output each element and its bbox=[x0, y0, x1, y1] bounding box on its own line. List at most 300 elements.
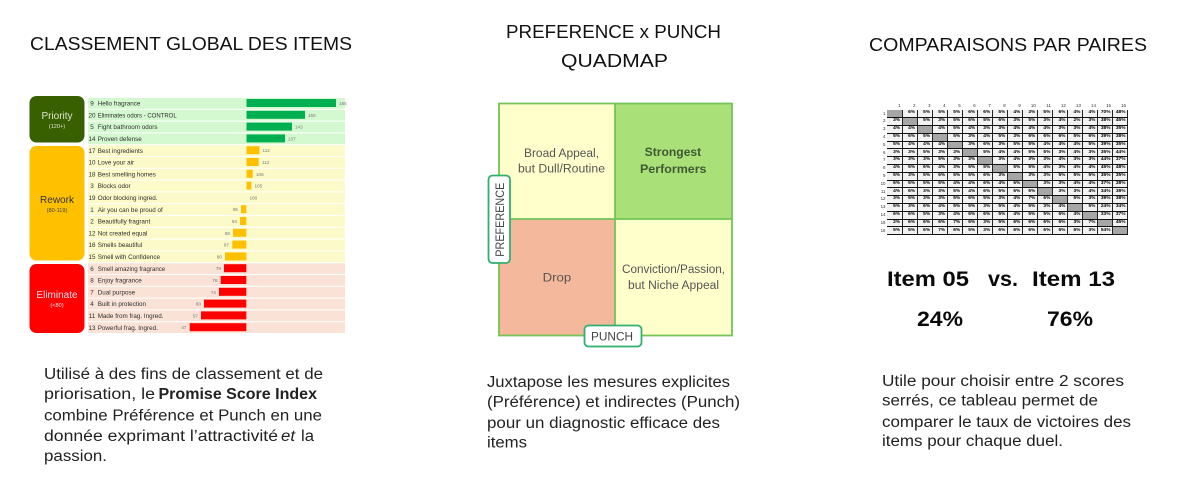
item numbers and labels: Not created equal bbox=[98, 230, 147, 237]
title: preference x punch quadmap bbox=[506, 21, 721, 71]
pairwise comparison matrix: 5% bbox=[998, 189, 1005, 194]
text block: classement description: la bbox=[301, 428, 314, 445]
item numbers and labels: 16 bbox=[88, 242, 96, 249]
pairwise comparison matrix: 5% bbox=[1088, 204, 1095, 209]
pairwise comparison matrix: 11 bbox=[881, 189, 886, 194]
pairwise comparison matrix: 3% bbox=[938, 118, 945, 123]
pairwise comparison matrix: 3% bbox=[998, 196, 1005, 201]
pairwise comparison matrix: 2 bbox=[913, 103, 916, 108]
pairwise comparison matrix: 5% bbox=[1088, 142, 1095, 147]
pairwise comparison matrix: 5% bbox=[1028, 212, 1035, 217]
score values: 143 bbox=[295, 125, 303, 130]
pairwise comparison matrix: 6% bbox=[1013, 228, 1020, 233]
pairwise comparison matrix: 5% bbox=[1058, 173, 1065, 178]
pairwise comparison matrix: 5% bbox=[923, 118, 930, 123]
pairwise comparison matrix: 5% bbox=[908, 196, 915, 201]
pairwise comparison matrix: 6% bbox=[983, 110, 990, 115]
pairwise comparison matrix: 13 bbox=[881, 204, 886, 209]
pairwise comparison matrix: 3% bbox=[1043, 204, 1050, 209]
item numbers and labels: Dual purpose bbox=[98, 289, 136, 296]
pairwise comparison matrix: 4% bbox=[968, 126, 975, 131]
score values: 112 bbox=[262, 148, 270, 153]
pairwise comparison matrix: 38% bbox=[1116, 181, 1126, 186]
pairwise comparison matrix: 3% bbox=[938, 196, 945, 201]
pairwise comparison matrix: 6% bbox=[1058, 228, 1065, 233]
quadrant: conviction: Conviction/Passion, bbox=[622, 264, 725, 276]
pairwise comparison matrix: 3% bbox=[998, 142, 1005, 147]
pairwise comparison matrix: 5% bbox=[1028, 150, 1035, 155]
pairwise comparison matrix: 4% bbox=[998, 150, 1005, 155]
pairwise comparison matrix: 3% bbox=[1073, 126, 1080, 131]
pairwise comparison matrix: 38% bbox=[1116, 196, 1126, 201]
pairwise comparison matrix: 5 bbox=[883, 142, 886, 147]
quadrant: conviction bbox=[615, 219, 732, 335]
pairwise comparison matrix: 4% bbox=[998, 181, 1005, 186]
item numbers and labels: Blocks odor bbox=[98, 183, 131, 190]
text block: classement description: Utilisé à des fins de classement et de bbox=[44, 366, 323, 383]
pairwise comparison matrix: 5% bbox=[938, 181, 945, 186]
pairwise comparison matrix: 3% bbox=[998, 157, 1005, 162]
pairwise comparison matrix: 6% bbox=[908, 189, 915, 194]
item numbers and labels: 19 bbox=[88, 195, 96, 202]
pairwise comparison matrix: 6% bbox=[968, 220, 975, 225]
pairwise comparison matrix: 70% bbox=[1101, 110, 1110, 115]
pairwise comparison matrix: 3% bbox=[938, 150, 945, 155]
pairwise comparison matrix: 6% bbox=[983, 212, 990, 217]
pairwise comparison matrix: 4% bbox=[968, 189, 975, 194]
pairwise comparison matrix: 5% bbox=[1073, 173, 1080, 178]
pairwise comparison matrix: 4% bbox=[1088, 165, 1095, 170]
pairwise comparison matrix: 4% bbox=[1043, 126, 1050, 131]
pairwise comparison matrix: 5% bbox=[1013, 165, 1020, 170]
pairwise comparison matrix: 4% bbox=[1013, 196, 1020, 201]
pairwise comparison matrix: 3% bbox=[893, 196, 900, 201]
pairwise comparison matrix: 3% bbox=[983, 220, 990, 225]
pairwise comparison matrix: 37% bbox=[1101, 181, 1110, 186]
pairwise comparison matrix: 5% bbox=[998, 212, 1005, 217]
pairwise comparison matrix: 3% bbox=[923, 157, 930, 162]
item numbers and labels: 7 bbox=[90, 289, 94, 296]
category: rework bbox=[30, 146, 84, 260]
item numbers and labels: 12 bbox=[88, 230, 96, 237]
score values: 95 bbox=[233, 207, 238, 212]
pairwise comparison matrix: 6% bbox=[983, 181, 990, 186]
pairwise comparison matrix: 5% bbox=[953, 204, 960, 209]
pairwise comparison matrix: 5% bbox=[923, 212, 930, 217]
category: rework: (80-119) bbox=[47, 208, 67, 214]
pairwise comparison matrix: 35% bbox=[1116, 126, 1126, 131]
pairwise comparison matrix: 3% bbox=[1013, 118, 1020, 123]
pairwise comparison matrix: 4% bbox=[893, 165, 900, 170]
pairwise comparison matrix: 5% bbox=[893, 204, 900, 209]
pairwise comparison matrix: 4% bbox=[968, 181, 975, 186]
pairwise comparison matrix: 3% bbox=[1043, 181, 1050, 186]
pairwise comparison matrix: 6% bbox=[1073, 228, 1080, 233]
pairwise comparison matrix: 3% bbox=[893, 150, 900, 155]
pairwise comparison matrix: 38% bbox=[1101, 126, 1110, 131]
score values: 105 bbox=[254, 184, 263, 189]
pairwise comparison matrix: 4% bbox=[953, 181, 960, 186]
pairwise comparison matrix: 5% bbox=[1073, 134, 1080, 139]
pairwise comparison matrix: 15 bbox=[881, 220, 886, 225]
pairwise comparison matrix: 3% bbox=[893, 157, 900, 162]
text block: classement description: donnée exprimant l’attractivité bbox=[44, 428, 278, 445]
quadrant: drop: Drop bbox=[543, 273, 571, 285]
pairwise comparison matrix: 3% bbox=[1073, 157, 1080, 162]
item numbers and labels: Hello fragrance bbox=[98, 101, 141, 108]
pairwise comparison matrix: 7% bbox=[938, 228, 945, 233]
item numbers and labels: Odor blocking ingred. bbox=[98, 195, 158, 202]
pairwise comparison matrix: 5% bbox=[953, 189, 960, 194]
pairwise comparison matrix: 10 bbox=[1031, 103, 1036, 108]
pairwise comparison matrix: 3% bbox=[938, 212, 945, 217]
pairwise comparison matrix: 44% bbox=[1101, 157, 1110, 162]
comparison headline: item 05 vs item 13: vs. bbox=[988, 268, 1018, 291]
item numbers and labels: Air you can be proud of bbox=[98, 207, 163, 214]
pairwise comparison matrix: 15 bbox=[1106, 103, 1111, 108]
pairwise comparison matrix: 45% bbox=[1101, 165, 1110, 170]
pairwise comparison matrix: 5% bbox=[908, 181, 915, 186]
pairwise comparison matrix: 5% bbox=[893, 173, 900, 178]
item numbers and labels: 4 bbox=[90, 301, 94, 308]
pairwise comparison matrix: 48% bbox=[1116, 165, 1126, 170]
pairwise comparison matrix: 4% bbox=[1073, 150, 1080, 155]
pairwise comparison matrix: 9 bbox=[1018, 103, 1021, 108]
pairwise comparison matrix: 4% bbox=[1073, 142, 1080, 147]
pairwise comparison matrix: 38% bbox=[1116, 189, 1126, 194]
pairwise comparison matrix: 5% bbox=[938, 157, 945, 162]
pairwise comparison matrix: 5% bbox=[983, 150, 990, 155]
pairwise comparison matrix: 6% bbox=[923, 228, 930, 233]
pairwise comparison matrix: 6% bbox=[1013, 189, 1020, 194]
pairwise comparison matrix: 4% bbox=[1043, 142, 1050, 147]
pairwise comparison matrix: 5% bbox=[983, 118, 990, 123]
text block: comparison description: items pour chaque duel. bbox=[882, 433, 1063, 450]
pairwise comparison matrix: 6% bbox=[908, 212, 915, 217]
pairwise comparison matrix: 5% bbox=[998, 110, 1005, 115]
pairwise comparison matrix: 44% bbox=[1116, 150, 1126, 155]
pairwise comparison matrix: 4% bbox=[1088, 126, 1095, 131]
pairwise comparison matrix: 6% bbox=[1043, 196, 1050, 201]
pairwise comparison matrix: 5% bbox=[1028, 118, 1035, 123]
quadrant: strongest performers bbox=[615, 104, 732, 219]
pairwise comparison matrix: 3% bbox=[1088, 196, 1095, 201]
pairwise comparison matrix: 3% bbox=[893, 118, 900, 123]
pairwise comparison matrix: 3% bbox=[908, 157, 915, 162]
pairwise comparison matrix: 6% bbox=[968, 110, 975, 115]
pairwise comparison matrix: 3% bbox=[953, 157, 960, 162]
score values: 60 bbox=[196, 302, 201, 307]
pairwise comparison matrix: 4% bbox=[1013, 204, 1020, 209]
score values: 156 bbox=[308, 113, 316, 118]
pairwise comparison matrix: 6% bbox=[998, 228, 1005, 233]
pairwise comparison matrix: 6% bbox=[968, 118, 975, 123]
panel: quadmap bbox=[488, 104, 732, 346]
pairwise comparison matrix: 54% bbox=[1101, 228, 1110, 233]
score values: 112 bbox=[262, 160, 270, 165]
pairwise comparison matrix: 3 bbox=[928, 103, 931, 108]
pairwise comparison matrix: 3% bbox=[1058, 189, 1065, 194]
comparison percentages bbox=[917, 308, 1093, 331]
pairwise comparison matrix: 10 bbox=[881, 181, 886, 186]
row backgrounds bbox=[88, 98, 345, 333]
pairwise comparison matrix: 5% bbox=[1028, 165, 1035, 170]
pairwise comparison matrix: 14 bbox=[881, 212, 886, 217]
pairwise comparison matrix: 3% bbox=[1043, 173, 1050, 178]
pairwise comparison matrix: 5% bbox=[908, 228, 915, 233]
pairwise comparison matrix: 33% bbox=[1101, 212, 1110, 217]
pairwise comparison matrix: 5% bbox=[893, 134, 900, 139]
category: eliminate bbox=[30, 264, 84, 333]
item numbers and labels: 3 bbox=[90, 183, 94, 190]
pairwise comparison matrix: 5% bbox=[923, 134, 930, 139]
pairwise comparison matrix: 5% bbox=[953, 196, 960, 201]
pairwise comparison matrix: 9 bbox=[883, 173, 886, 178]
pairwise comparison matrix: 6% bbox=[998, 118, 1005, 123]
pairwise comparison matrix: 4% bbox=[938, 126, 945, 131]
item numbers and labels: 15 bbox=[88, 254, 96, 261]
pairwise comparison matrix: 6% bbox=[908, 134, 915, 139]
text block: comparison description: comparer le taux de victoires des bbox=[882, 414, 1131, 431]
pairwise comparison matrix: 3% bbox=[1028, 173, 1035, 178]
pairwise comparison matrix: 3% bbox=[1028, 157, 1035, 162]
pairwise comparison matrix: 5% bbox=[953, 118, 960, 123]
pairwise comparison matrix: 6% bbox=[1058, 220, 1065, 225]
pairwise comparison matrix: 5% bbox=[953, 134, 960, 139]
text block: classement description: combine Préférence et Punch en une bbox=[44, 408, 322, 424]
pairwise comparison matrix: 24% bbox=[1101, 204, 1110, 209]
score values: 94 bbox=[232, 219, 237, 224]
category: priority bbox=[30, 96, 84, 142]
item numbers and labels: Smells beautiful bbox=[98, 242, 142, 249]
text block: quadmap description: items bbox=[487, 434, 527, 452]
pairwise comparison matrix: 4% bbox=[1088, 181, 1095, 186]
pairwise comparison matrix: 3% bbox=[1073, 189, 1080, 194]
pairwise comparison matrix: 39% bbox=[1101, 196, 1110, 201]
bars bbox=[190, 99, 336, 331]
item numbers and labels: Eliminates odors - CONTROL bbox=[98, 112, 177, 119]
pairwise comparison matrix: 14 bbox=[1091, 103, 1096, 108]
pairwise comparison matrix: 13 bbox=[1076, 103, 1081, 108]
pairwise comparison matrix: 8 bbox=[883, 165, 886, 170]
pairwise comparison matrix: 4% bbox=[983, 134, 990, 139]
quadrant: broad appeal bbox=[499, 104, 615, 219]
pairwise comparison matrix: 5% bbox=[1013, 142, 1020, 147]
pairwise comparison matrix: 5% bbox=[998, 220, 1005, 225]
pairwise comparison matrix: 3% bbox=[983, 204, 990, 209]
pairwise comparison matrix: 3% bbox=[1043, 118, 1050, 123]
category: priority: (120+) bbox=[49, 124, 65, 130]
comparison percentages: 24% bbox=[917, 308, 963, 331]
text block: quadmap description: pour un diagnostic efficace des bbox=[487, 415, 720, 432]
item numbers and labels: Smell with Confidence bbox=[98, 254, 160, 261]
pairwise comparison matrix: 6% bbox=[938, 173, 945, 178]
score values bbox=[181, 101, 347, 330]
pairwise comparison matrix: 6% bbox=[923, 204, 930, 209]
pairwise comparison matrix: 6% bbox=[968, 196, 975, 201]
pairwise comparison matrix: 3% bbox=[1088, 157, 1095, 162]
pairwise comparison matrix: 5% bbox=[1043, 150, 1050, 155]
text block: comparison description: serrés, ce tableau permet de bbox=[882, 392, 1098, 410]
pairwise comparison matrix: 3% bbox=[998, 126, 1005, 131]
pairwise comparison matrix: 5% bbox=[953, 173, 960, 178]
pairwise comparison matrix: 3% bbox=[968, 157, 975, 162]
pairwise comparison matrix: 16 bbox=[881, 228, 886, 233]
title: preference x punch quadmap: PREFERENCE x PUNCH bbox=[506, 21, 721, 42]
pairwise comparison matrix: 3% bbox=[1058, 181, 1065, 186]
pairwise comparison matrix: 5% bbox=[1073, 196, 1080, 201]
pairwise comparison matrix: 6% bbox=[983, 142, 990, 147]
pairwise comparison matrix: 3% bbox=[923, 189, 930, 194]
pairwise comparison matrix: 4% bbox=[923, 142, 930, 147]
pairwise comparison matrix: 4% bbox=[938, 204, 945, 209]
pairwise comparison matrix: 2% bbox=[1073, 118, 1080, 123]
pairwise comparison matrix: 35% bbox=[1101, 173, 1110, 178]
pairwise comparison matrix: 4% bbox=[1013, 212, 1020, 217]
pairwise comparison matrix: 5% bbox=[968, 228, 975, 233]
pairwise comparison matrix: 3% bbox=[1043, 157, 1050, 162]
pairwise comparison matrix: 5% bbox=[923, 150, 930, 155]
quadrant: drop bbox=[499, 219, 615, 335]
pairwise comparison matrix: 5% bbox=[998, 204, 1005, 209]
pairwise comparison matrix: 6% bbox=[983, 189, 990, 194]
pairwise comparison matrix: 6% bbox=[923, 220, 930, 225]
text block: comparison description: Utile pour choisir entre 2 scores bbox=[882, 373, 1124, 390]
pairwise comparison matrix: 4% bbox=[1013, 150, 1020, 155]
item numbers and labels: 2 bbox=[90, 219, 94, 226]
text block: classement description: Promise Score Index bbox=[158, 386, 317, 403]
pairwise comparison matrix: 35% bbox=[1116, 142, 1126, 147]
pairwise comparison matrix: 5% bbox=[998, 134, 1005, 139]
score values: 79 bbox=[216, 266, 221, 271]
pairwise comparison matrix: 3% bbox=[953, 150, 960, 155]
item numbers and labels: Fight bathroom odors bbox=[98, 124, 158, 131]
pairwise comparison matrix: 4% bbox=[1073, 110, 1080, 115]
pairwise comparison matrix: 4% bbox=[1043, 165, 1050, 170]
pairwise comparison matrix: 3% bbox=[908, 173, 915, 178]
score values: 106 bbox=[256, 172, 264, 177]
pairwise comparison matrix: 4% bbox=[953, 212, 960, 217]
text block: quadmap description bbox=[487, 374, 740, 452]
pairwise comparison matrix: 34% bbox=[1101, 189, 1110, 194]
quadrant: conviction: but Niche Appeal bbox=[628, 280, 719, 292]
pairwise comparison matrix: 5% bbox=[983, 165, 990, 170]
pairwise comparison matrix: 3% bbox=[983, 228, 990, 233]
pairwise comparison matrix: 7% bbox=[1028, 196, 1035, 201]
quadrant: strongest performers: Performers bbox=[640, 164, 706, 176]
pairwise comparison matrix: 12 bbox=[1061, 103, 1066, 108]
item numbers and labels: 14 bbox=[88, 136, 96, 143]
pairwise comparison matrix: 7% bbox=[1088, 220, 1095, 225]
category: eliminate: (<80) bbox=[50, 303, 64, 309]
item numbers and labels: Best smelling homes bbox=[98, 171, 156, 178]
pairwise comparison matrix: 3% bbox=[968, 134, 975, 139]
item numbers and labels: Love your air bbox=[98, 160, 134, 167]
pairwise comparison matrix: 4 bbox=[943, 103, 946, 108]
item numbers and labels: 10 bbox=[88, 160, 96, 167]
pairwise comparison matrix: 4% bbox=[1058, 204, 1065, 209]
axis label: preference bbox=[488, 176, 510, 263]
pairwise comparison matrix: 5% bbox=[923, 173, 930, 178]
item numbers and labels: 17 bbox=[88, 148, 96, 155]
quadrant: broad appeal: Broad Appeal, bbox=[524, 148, 599, 160]
pairwise comparison matrix: 16 bbox=[1121, 103, 1126, 108]
pairwise comparison matrix: 5% bbox=[908, 165, 915, 170]
pairwise comparison matrix: 4% bbox=[893, 189, 900, 194]
pairwise comparison matrix: 38% bbox=[1101, 118, 1110, 123]
score values: 88 bbox=[225, 231, 230, 236]
item numbers and labels: 13 bbox=[88, 325, 96, 332]
item numbers and labels bbox=[88, 101, 177, 332]
pairwise comparison matrix: 4 bbox=[883, 134, 886, 139]
text block: classement description: priorisation, le bbox=[44, 386, 155, 403]
item numbers and labels: Proven defense bbox=[98, 136, 142, 143]
score values: 74 bbox=[211, 290, 216, 295]
pairwise comparison matrix: 5% bbox=[893, 228, 900, 233]
pairwise comparison matrix: 11 bbox=[1046, 103, 1051, 108]
pairwise comparison matrix: 5% bbox=[953, 126, 960, 131]
pairwise comparison matrix: 5% bbox=[1043, 212, 1050, 217]
pairwise comparison matrix: 6% bbox=[983, 173, 990, 178]
pairwise comparison matrix bbox=[880, 103, 1128, 235]
pairwise comparison matrix: 6% bbox=[908, 110, 915, 115]
category: eliminate: Eliminate bbox=[36, 290, 78, 301]
pairwise comparison matrix: 7 bbox=[988, 103, 991, 108]
pairwise comparison matrix: 3% bbox=[923, 196, 930, 201]
comparison headline: item 05 vs item 13: Item 05 bbox=[887, 268, 969, 291]
pairwise comparison matrix: 6% bbox=[1013, 220, 1020, 225]
pairwise comparison matrix: 3% bbox=[1073, 220, 1080, 225]
pairwise comparison matrix: 4% bbox=[893, 126, 900, 131]
pairwise comparison matrix: 7% bbox=[953, 220, 960, 225]
pairwise comparison matrix: 6% bbox=[938, 220, 945, 225]
pairwise comparison matrix: 3% bbox=[1058, 165, 1065, 170]
pairwise comparison matrix: 3 bbox=[883, 126, 886, 131]
score values: 137 bbox=[288, 136, 296, 141]
score values: 80 bbox=[217, 254, 222, 259]
pairwise comparison matrix: 5% bbox=[953, 110, 960, 115]
pairwise comparison matrix: 4% bbox=[1073, 181, 1080, 186]
pairwise comparison matrix: 34% bbox=[1116, 204, 1126, 209]
score values: 47 bbox=[181, 325, 187, 330]
pairwise comparison matrix: 1 bbox=[898, 103, 901, 108]
pairwise comparison matrix: 2 bbox=[883, 118, 886, 123]
pairwise comparison matrix: 5% bbox=[1028, 204, 1035, 209]
pairwise comparison matrix: 6% bbox=[1043, 220, 1050, 225]
pairwise comparison matrix: 2% bbox=[893, 220, 900, 225]
pairwise comparison matrix: 3% bbox=[1058, 126, 1065, 131]
pairwise comparison matrix: 6% bbox=[1028, 228, 1035, 233]
pairwise comparison matrix: 6% bbox=[968, 212, 975, 217]
pairwise comparison matrix: 6 bbox=[973, 103, 976, 108]
pairwise comparison matrix: 4% bbox=[1058, 142, 1065, 147]
pairwise comparison matrix: 6% bbox=[1013, 181, 1020, 186]
pairwise comparison matrix: 35% bbox=[1116, 173, 1126, 178]
item numbers and labels: Smell amazing fragrance bbox=[98, 266, 166, 273]
score values: 76 bbox=[212, 278, 218, 283]
comparison percentages: 76% bbox=[1047, 308, 1093, 331]
pairwise comparison matrix: 3% bbox=[1058, 150, 1065, 155]
item numbers and labels: Made from frag. Ingred. bbox=[98, 313, 164, 320]
axis label: preference: PREFERENCE bbox=[495, 182, 507, 257]
pairwise comparison matrix: 3% bbox=[908, 204, 915, 209]
pairwise comparison matrix: 37% bbox=[1116, 212, 1126, 217]
item numbers and labels: Powerful frag. Ingred. bbox=[98, 325, 158, 332]
item numbers and labels: Enjoy fragrance bbox=[98, 278, 142, 285]
pairwise comparison matrix: 4% bbox=[938, 142, 945, 147]
pairwise comparison matrix: 4% bbox=[1058, 118, 1065, 123]
pairwise comparison matrix: 6% bbox=[893, 212, 900, 217]
